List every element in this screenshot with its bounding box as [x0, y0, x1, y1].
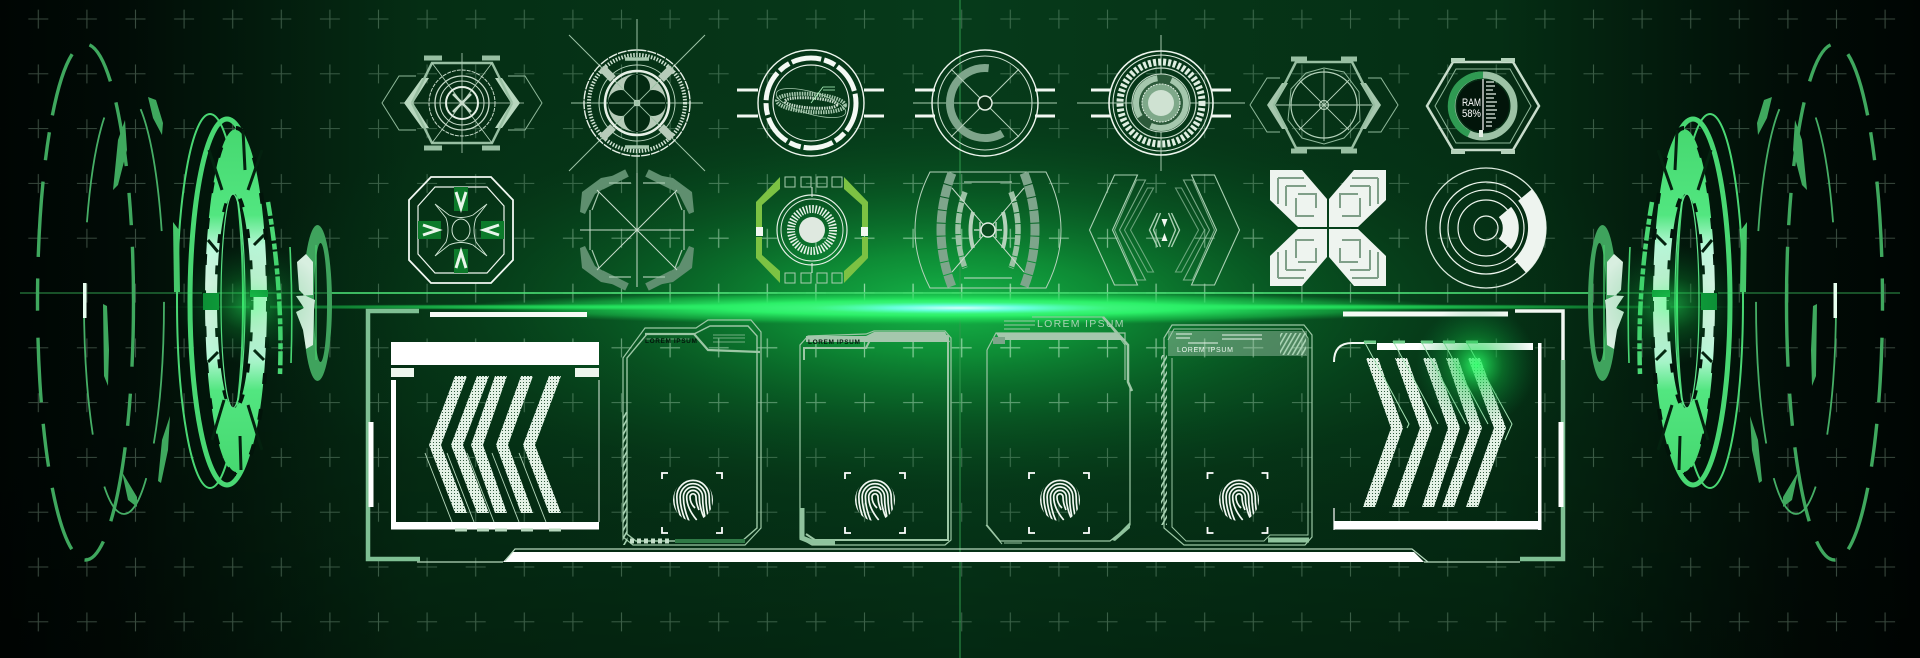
card 3 tiny notes [1004, 321, 1035, 329]
frame top bars [430, 312, 1508, 317]
card 1 label: LOREM IPSUM [645, 338, 697, 345]
card 3 [986, 317, 1132, 544]
card 4 fingerprint [1213, 477, 1264, 530]
card 2 label: LOREM IPSUM [808, 339, 860, 346]
frame white side bars [371, 422, 1561, 507]
icon row 1: crosshair circle [913, 50, 1057, 156]
left chevrons [429, 376, 561, 513]
card 3 label: LOREM IPSUM [1037, 318, 1125, 330]
card 1 [623, 320, 761, 545]
frame bottom bar [503, 552, 1424, 562]
left ring cluster [38, 44, 332, 560]
side ring glow right [1595, 244, 1745, 364]
icon row 2: green octagon dial [756, 177, 868, 283]
right ring cluster [1588, 44, 1882, 560]
flare glow on right chevrons [1416, 303, 1536, 427]
icon row 1: circle with rays [569, 19, 705, 187]
icon row 2: gray octagon target [580, 173, 694, 287]
percent label: 58% [1462, 108, 1481, 120]
icon row 1: RAM gauge hexagon [1427, 60, 1539, 152]
icon row 2: radar with white arcs [1426, 168, 1546, 288]
icon row 2: white X shape [1270, 170, 1386, 286]
panel frame [368, 311, 1563, 562]
background glow [230, 70, 1670, 540]
RAM label: RAM [1462, 97, 1481, 109]
right chevron panel [1334, 341, 1542, 530]
right chevrons [1363, 358, 1506, 507]
icon row 1: tech dial [1077, 35, 1245, 171]
card 1 fingerprint [667, 477, 718, 530]
central lens flare [155, 291, 1755, 325]
bright cross grid near centre [475, 174, 1448, 412]
icon row 1: circle with orbit [737, 50, 884, 156]
card 3 fingerprint [1034, 477, 1085, 530]
card 2 fingerprint [849, 477, 900, 530]
card 2 [800, 331, 951, 545]
icon row 2: nested chevrons [1090, 175, 1240, 285]
card 4 [1164, 325, 1312, 545]
left chevron panel [391, 342, 599, 530]
icon row 2: arched signal target [915, 172, 1061, 288]
icon row 2: octagon with green arrows [409, 177, 513, 283]
card 4 label: LOREM IPSUM [1177, 347, 1234, 354]
icon row 1: hexagon with concentric circles [382, 53, 542, 153]
icon row 1: hexagon with spoked wheel [1250, 59, 1398, 151]
side ring glow left [175, 244, 325, 364]
